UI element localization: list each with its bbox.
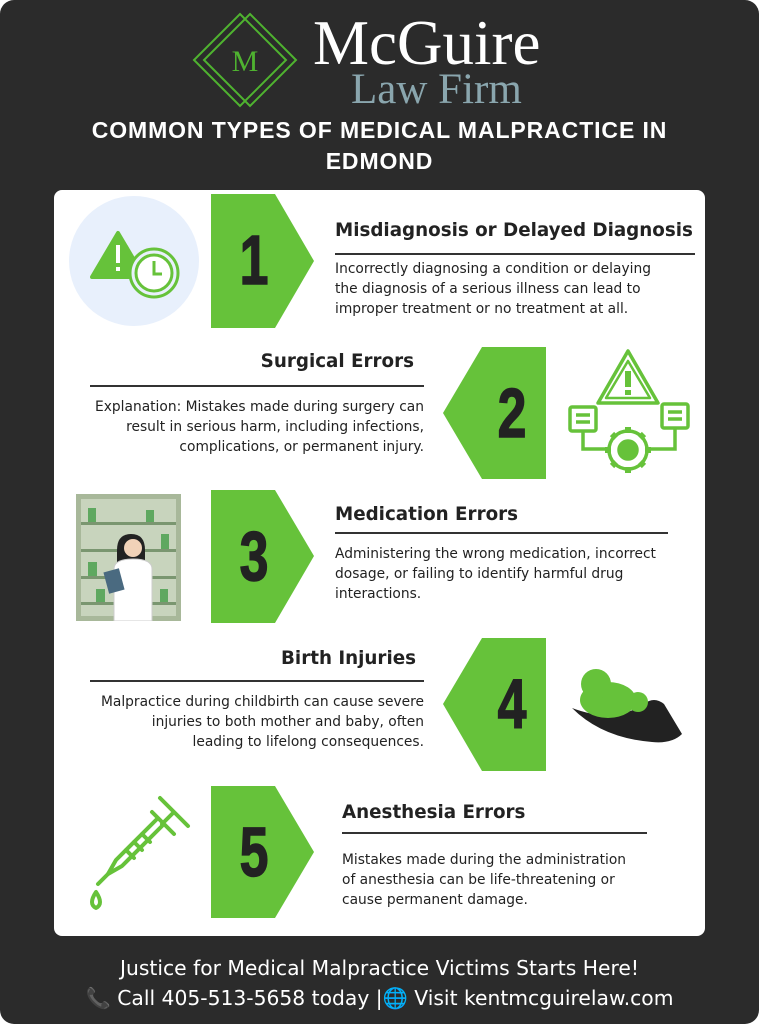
- text 2: result in serious harm, including infections,: [126, 419, 424, 435]
- text 1: the diagnosis of a serious illness can lead to: [335, 281, 641, 297]
- title: EDMOND: [326, 148, 433, 174]
- text 4: leading to lifelong consequences.: [192, 734, 424, 750]
- text 3: dosage, or failing to identify harmful drug: [335, 566, 623, 582]
- logo: Law Firm: [351, 66, 522, 113]
- text 5: [342, 852, 626, 908]
- item 2: 2: [498, 374, 526, 452]
- arrow 5: [211, 786, 314, 918]
- heading 2: Surgical Errors: [261, 351, 414, 372]
- footer: Justice for Medical Malpractice Victims Starts Here!: [120, 956, 639, 980]
- item 5: 5: [240, 813, 268, 891]
- item 2: [90, 347, 690, 479]
- item 3: [76, 490, 668, 623]
- text 3: [335, 546, 656, 602]
- arrow 1: [211, 194, 314, 328]
- item 4: 4: [498, 665, 526, 743]
- text 4: Malpractice during childbirth can cause severe: [101, 694, 424, 710]
- heading 5: Anesthesia Errors: [342, 802, 525, 823]
- icon: doctor pharmacy: [76, 494, 181, 621]
- text 5: of anesthesia can be life-threatening or: [342, 872, 615, 888]
- icon: warning gear: [568, 349, 690, 473]
- item 1: [69, 194, 695, 328]
- item 4: [90, 638, 682, 771]
- logo: McGuire: [313, 8, 540, 78]
- footer: 📞 Call 405-513-5658 today |🌐 Visit kentmcguirelaw.com: [86, 986, 673, 1010]
- title: [92, 117, 667, 174]
- arrow 2: [443, 347, 546, 479]
- heading 4: Birth Injuries: [281, 648, 416, 669]
- text 2: complications, or permanent injury.: [179, 439, 424, 455]
- heading 1: Misdiagnosis or Delayed Diagnosis: [335, 220, 693, 241]
- icon: syringe: [90, 796, 190, 910]
- text 1: [335, 261, 651, 317]
- footer: [86, 956, 673, 1010]
- text 3: Administering the wrong medication, incorrect: [335, 546, 656, 562]
- arrow 4: [443, 638, 546, 771]
- text 2: Explanation: Mistakes made during surgery can: [95, 399, 424, 415]
- text 4: injuries to both mother and baby, often: [152, 714, 424, 730]
- text 5: cause permanent damage.: [342, 892, 528, 908]
- panel: list: [54, 190, 705, 936]
- icon: baby in hand: [572, 669, 682, 742]
- icon: warning clock: [69, 196, 199, 326]
- text 1: improper treatment or no treatment at all.: [335, 301, 628, 317]
- title: COMMON TYPES OF MEDICAL MALPRACTICE IN: [92, 117, 667, 143]
- text 1: Incorrectly diagnosing a condition or delaying: [335, 261, 651, 277]
- logo: [192, 8, 540, 113]
- arrow 3: [211, 490, 314, 623]
- item 5: [90, 786, 647, 918]
- text 4: [101, 694, 424, 750]
- heading 3: Medication Errors: [335, 504, 518, 525]
- text 2: [95, 399, 424, 455]
- item 3: 3: [240, 517, 268, 595]
- logo: M: [232, 45, 258, 78]
- text 3: interactions.: [335, 586, 421, 602]
- text 5: Mistakes made during the administration: [342, 852, 626, 868]
- item 1: 1: [240, 221, 268, 299]
